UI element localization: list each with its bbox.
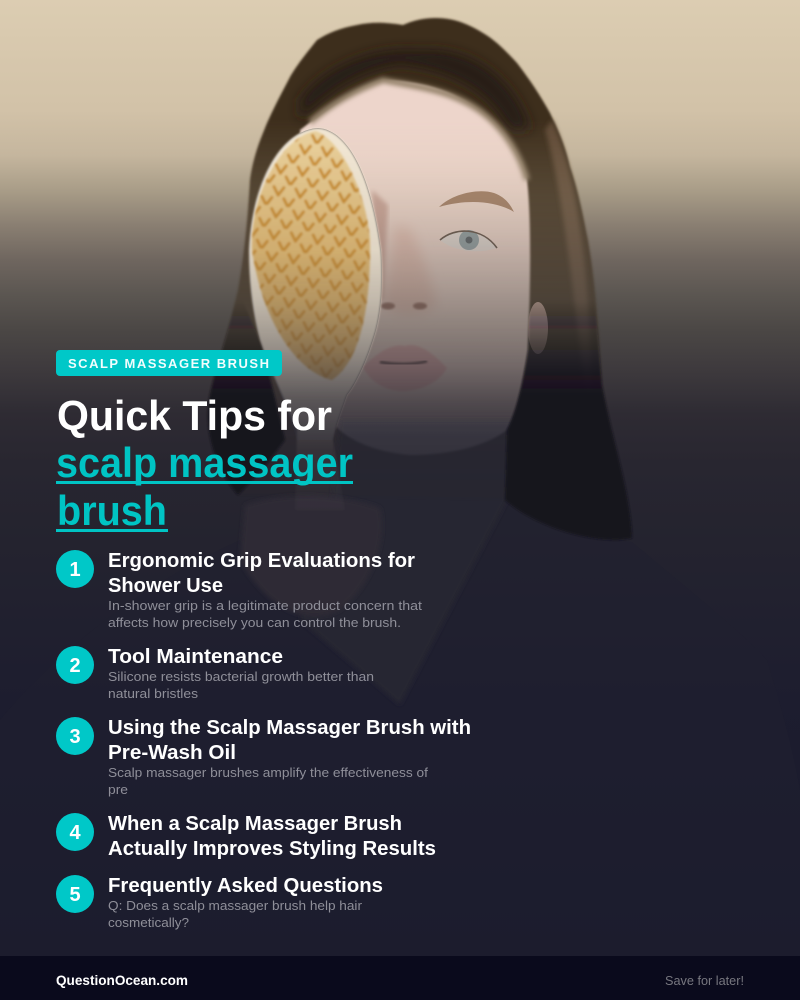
hair: [225, 16, 599, 378]
tip 2 description: [108, 669, 374, 701]
number badge 5: 5: [69, 884, 81, 906]
number badge 4: 4: [69, 822, 81, 844]
tip 3 heading: Pre-Wash Oil: [108, 742, 236, 764]
tip 2: [56, 646, 374, 701]
tip 1 heading: [108, 550, 415, 597]
tip 5 description: cosmetically?: [108, 915, 189, 930]
tip 3: [56, 717, 471, 797]
eyebrow: [439, 191, 514, 212]
dark lower hair: [208, 290, 632, 540]
robe: [0, 500, 800, 1000]
tip 4 heading: When a Scalp Massager Brush: [108, 813, 402, 835]
number badge 5: [56, 875, 94, 913]
tip 1 description: affects how precisely you can control the brush.: [108, 615, 401, 630]
tip 3 description: Scalp massager brushes amplify the effectiveness of: [108, 765, 428, 780]
hairline highlight: [310, 80, 527, 180]
photo: woman's head: [225, 16, 599, 455]
title: Quick Tips for: [57, 392, 332, 439]
tip 3 heading: Using the Scalp Massager Brush with: [108, 717, 471, 739]
tip 5 heading: Frequently Asked Questions: [108, 875, 383, 897]
brush underlay: [249, 128, 382, 440]
footer brand: QuestionOcean.com: [56, 972, 188, 988]
photo: robe and neck, dimmed: [0, 420, 800, 1000]
number badge 3: [56, 717, 94, 755]
number badge 3: 3: [69, 726, 81, 748]
hair shadows: [300, 49, 530, 130]
number badge 2: [56, 646, 94, 684]
footer bar: [0, 956, 800, 1000]
tag: scalp massager brush: SCALP MASSAGER BRUSH: [68, 356, 269, 371]
right hair strands: [544, 120, 588, 336]
tip 4 heading: Actually Improves Styling Results: [108, 838, 436, 860]
number badge 4: [56, 813, 94, 851]
tip 5 description: Q: Does a scalp massager brush help hair: [108, 898, 363, 913]
hand: [240, 496, 382, 616]
title: scalp massager: [56, 439, 353, 486]
tag: scalp massager brush: [56, 350, 282, 376]
tip 4 heading: [108, 813, 436, 860]
tip 3 description: [108, 765, 428, 797]
shadow beside brush: [372, 190, 388, 300]
tip 2 heading: Tool Maintenance: [108, 646, 283, 668]
lips: [364, 346, 446, 387]
neck and chest: [300, 420, 515, 705]
tip 1: [56, 550, 422, 630]
tip 3 description: pre: [108, 782, 128, 797]
tip 2 description: Silicone resists bacterial growth better than: [108, 669, 374, 684]
footer save note: Save for later!: [665, 973, 744, 988]
bristles: [252, 131, 370, 380]
tip 4: [56, 813, 436, 860]
tip 1 heading: Ergonomic Grip Evaluations for: [108, 550, 415, 572]
tip 5: [56, 875, 383, 930]
face: [300, 80, 530, 455]
number badge 1: 1: [69, 559, 81, 581]
brush: [249, 128, 382, 510]
tip 3 heading: [108, 717, 471, 764]
number badge 2: 2: [69, 655, 81, 677]
tip 2 description: natural bristles: [108, 686, 199, 701]
title: [56, 392, 353, 534]
brush body: [249, 128, 382, 510]
tip 5 description: [108, 898, 363, 930]
title: brush: [57, 487, 167, 534]
ear: [528, 302, 548, 354]
tip 1 description: [108, 598, 422, 630]
nose: [388, 228, 432, 311]
number badge 1: [56, 550, 94, 588]
tip 1 description: In-shower grip is a legitimate product concern that: [108, 598, 422, 613]
eye: [440, 230, 497, 251]
tip 1 heading: Shower Use: [108, 575, 223, 597]
